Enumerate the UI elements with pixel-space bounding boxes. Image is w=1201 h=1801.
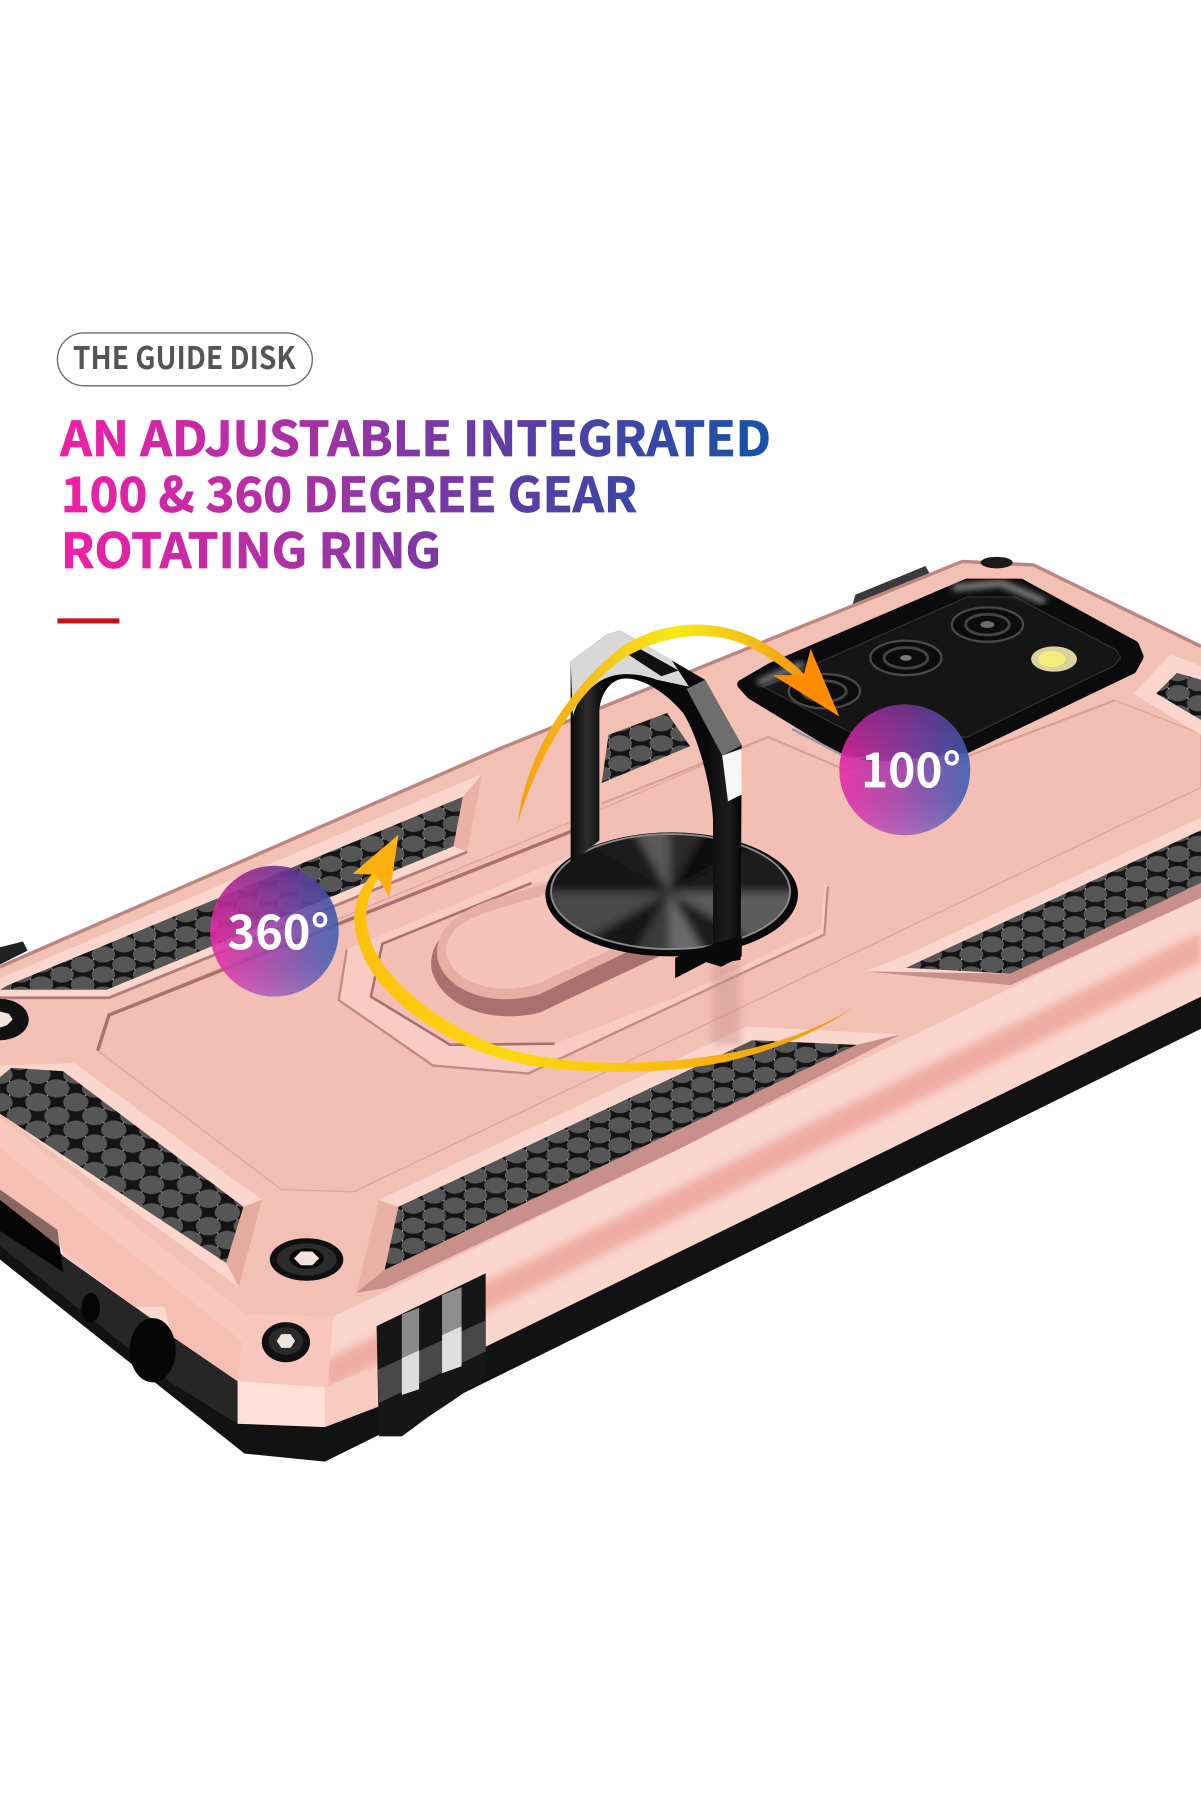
title <box>59 400 771 582</box>
arrow: 100 degree rotation <box>518 625 839 823</box>
octagon inner face <box>371 855 824 1045</box>
badge: 360 degrees <box>210 866 339 997</box>
grip: right bevel <box>865 817 1201 985</box>
grip: top left bevel <box>0 774 482 998</box>
screw: lower centre <box>270 1238 343 1281</box>
grip: top right <box>1156 673 1201 720</box>
phone case illustration <box>0 557 1201 1462</box>
grip: lower left bevel <box>0 1063 262 1287</box>
badge: 100 degrees <box>839 704 970 835</box>
brushed metal wedges <box>552 835 789 948</box>
side buttons top <box>852 566 930 611</box>
ring top slot <box>628 649 679 676</box>
screw: left <box>0 999 29 1040</box>
corner front face <box>238 1381 325 1427</box>
lens 1 <box>952 607 1023 642</box>
camera gloss highlights <box>953 583 1045 602</box>
case body <box>0 561 1201 1425</box>
central plate <box>98 700 1201 1192</box>
left bumper dark grey face <box>0 1217 238 1424</box>
grip: lower honeycomb <box>385 1040 857 1270</box>
left side strip <box>0 1117 245 1381</box>
grip: lower bevel <box>356 1026 900 1293</box>
top speaker hole <box>981 557 1013 568</box>
small mic hole <box>82 1293 100 1323</box>
ring foot <box>675 936 742 978</box>
title: 100 & 360 DEGREE GEAR <box>61 456 637 526</box>
grip: right honeycomb <box>906 830 1201 974</box>
side band <box>325 896 1201 1425</box>
badge: 360 degrees: 360° <box>227 894 330 964</box>
title: ROTATING RING <box>61 512 441 582</box>
grip: top centre <box>602 713 690 783</box>
flash <box>1031 646 1077 672</box>
ring cast shadow <box>712 962 741 1045</box>
ring base disc <box>545 832 798 956</box>
folding ring <box>571 630 742 978</box>
ring white highlight <box>722 749 742 801</box>
lens 2 <box>870 641 942 675</box>
ring grey facet <box>687 680 742 755</box>
lens 3 <box>789 674 860 708</box>
red accent line <box>57 618 119 623</box>
top face <box>0 561 1201 1317</box>
left edge button <box>0 941 28 964</box>
grip: top left honeycomb <box>0 797 463 990</box>
camera island <box>742 583 1139 758</box>
side grip stripes <box>377 1273 486 1436</box>
badge: 100 degrees: 100° <box>861 732 961 802</box>
arrow: 360 degree rotation <box>352 835 854 1072</box>
phone black bottom bumper <box>0 987 1201 1462</box>
jack hole <box>130 1318 176 1382</box>
left side port recess <box>0 1189 63 1272</box>
top edge rim <box>0 561 1201 967</box>
ring silver top <box>571 630 689 716</box>
screw: corner <box>262 1322 310 1362</box>
grip: lower left honeycomb <box>0 1068 243 1263</box>
octagon recess <box>339 848 829 1074</box>
badge: the guide disk: THE GUIDE DISK <box>73 333 296 378</box>
slider slot <box>431 855 666 1016</box>
plate dark left edge <box>98 824 589 1051</box>
grip: top right bevel <box>1133 654 1201 735</box>
title: AN ADJUSTABLE INTEGRATED <box>59 400 771 470</box>
